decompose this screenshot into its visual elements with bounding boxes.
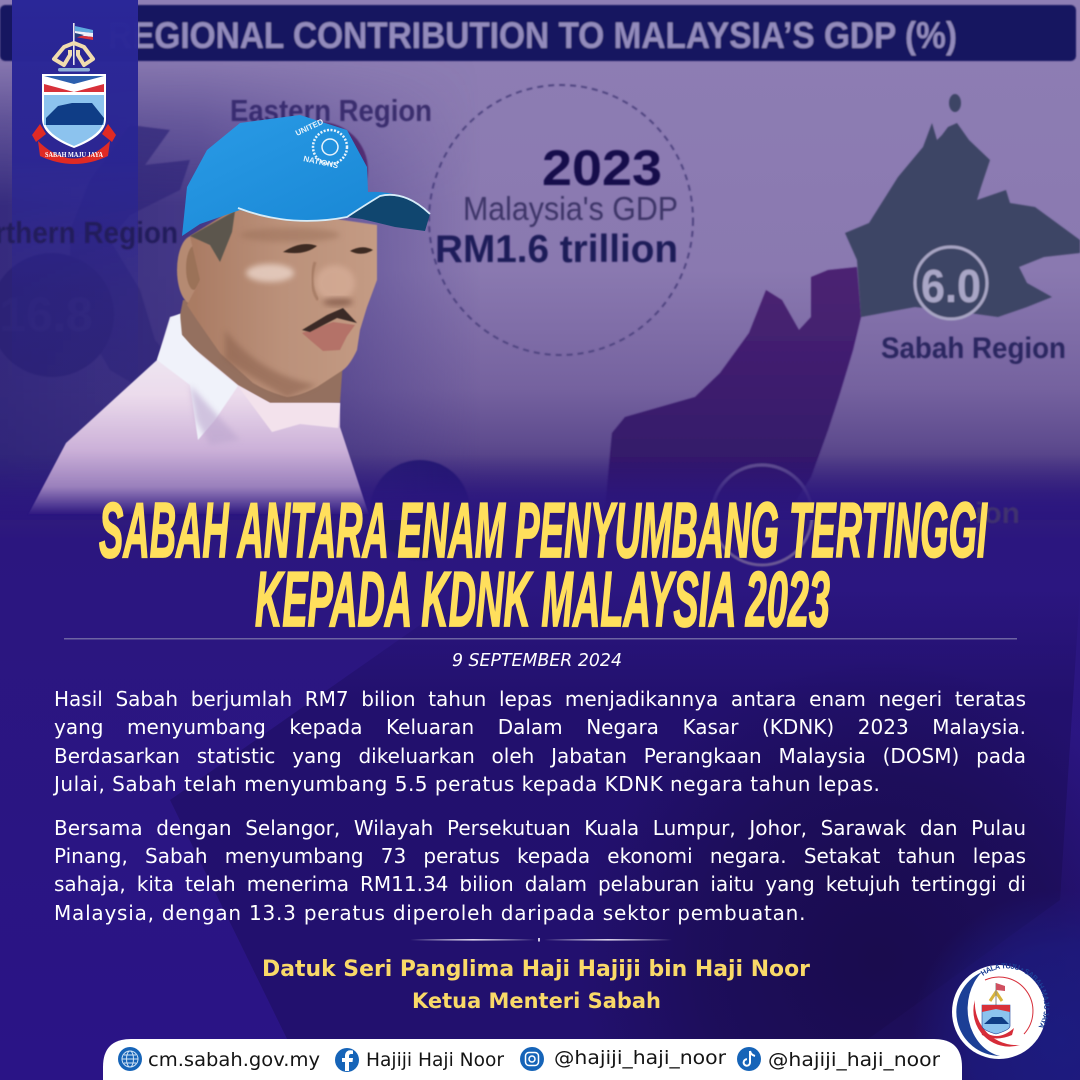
GDP text: 2023	[542, 140, 662, 196]
blue logo column	[12, 0, 138, 400]
Sabah 6.0 badge: 6.0	[921, 260, 981, 312]
motto ribbon	[32, 124, 116, 164]
lower region badge	[712, 465, 812, 565]
arms crest	[54, 43, 93, 65]
GDP text: RM1.6 trillion	[435, 228, 678, 271]
dark lower-left badge	[370, 460, 470, 560]
instagram: @hajiji_haji_noor	[554, 1047, 726, 1069]
UN cap emblem	[294, 117, 347, 170]
map: Sabah	[845, 94, 1080, 317]
body text: Hasil Sabah berjumlah RM7 bilion tahun lepas menjadikannya antara enam negeri teratas	[54, 687, 1026, 711]
Sabah coat of arms	[32, 23, 116, 164]
hair	[190, 211, 235, 262]
Eastern badge behind cap	[272, 122, 368, 218]
body text: Berdasarkan statistic yang dikeluarkan oleh Jabatan Perangkaan Malaysia (DOSM) pada	[54, 744, 1026, 768]
lower region label: ion	[975, 497, 1020, 530]
footer bar	[103, 1039, 962, 1080]
Sabah Region label: Sabah Region	[881, 332, 1066, 365]
Sabah 6.0 badge	[915, 247, 987, 319]
cap	[182, 115, 430, 236]
signature name: Datuk Seri Panglima Haji Hajiji bin Haji Noor	[262, 957, 810, 982]
shirt	[28, 313, 369, 515]
motto ribbon: SABAH MAJU JAYA	[45, 150, 103, 159]
slide heading band: REGIONAL CONTRIBUTION TO MALAYSIA’S GDP (%)	[108, 15, 957, 56]
round emblem	[952, 963, 1050, 1059]
map: peninsular region	[70, 125, 190, 400]
body text: yang menyumbang kepada Keluaran Dalam Negara Kasar (KDNK) 2023 Malaysia.	[54, 715, 1026, 739]
tiktok: @hajiji_haji_noor	[768, 1049, 940, 1071]
map: Sarawak	[604, 267, 861, 520]
moustache	[302, 308, 357, 332]
divider	[64, 638, 1017, 640]
signature divider	[410, 938, 672, 942]
body text	[52, 687, 1026, 925]
shirt collar	[157, 314, 238, 440]
crest wreath	[58, 68, 90, 72]
face shading	[225, 228, 355, 398]
left dark veil	[0, 60, 448, 488]
GDP text: Malaysia's GDP	[463, 190, 678, 227]
facebook: Hajiji Haji Noor	[366, 1049, 504, 1071]
shirt shadow	[190, 385, 240, 445]
body text: sahaja, kita telah menerima RM11.34 bilion dalam pelaburan iaitu yang ketujuh tertinggi di	[54, 872, 1026, 896]
16.8 badge	[0, 253, 114, 377]
lower background facets	[170, 590, 1080, 1080]
slide heading band	[0, 5, 1076, 61]
eyes	[283, 244, 317, 253]
UN cap emblem: NATIONS	[303, 154, 340, 170]
GDP text	[435, 140, 678, 271]
body text: Julai, Sabah telah menyumbang 5.5 peratus kepada KDNK negara tahun lepas.	[54, 772, 880, 796]
background photo: GDP slide	[0, 5, 1080, 565]
Northern Region label: rthern Region	[0, 215, 178, 250]
Eastern Region label: Eastern Region	[230, 93, 432, 128]
lower fade over photo	[0, 455, 1080, 520]
emblem ring text: HALA TUJU • SABAH MAJU JAYA	[980, 963, 1050, 1028]
16.8 badge: 16.8	[0, 289, 93, 342]
neck	[177, 300, 343, 403]
lips	[302, 322, 355, 351]
date: 9 SEPTEMBER 2024	[452, 651, 622, 671]
signature role: Ketua Menteri Sabah	[412, 989, 661, 1013]
flag	[73, 23, 93, 65]
shield	[42, 74, 106, 148]
body text: Malaysia, dengan 13.3 peratus diperoleh daripada sektor pembuatan.	[54, 901, 806, 925]
UN cap emblem: UNITED	[294, 117, 325, 138]
ear	[177, 236, 207, 304]
shirt right collar	[238, 386, 340, 432]
cap brim underside	[347, 195, 430, 231]
headline	[99, 486, 988, 643]
website: cm.sabah.gov.my	[148, 1049, 320, 1071]
portrait	[28, 115, 430, 515]
dashed GDP circle	[429, 85, 693, 355]
body text: Bersama dengan Selangor, Wilayah Persekutuan Kuala Lumpur, Johor, Sarawak dan Pulau	[54, 816, 1026, 840]
cap brim edge	[238, 195, 430, 221]
head	[187, 205, 377, 397]
body text: Pinang, Sabah menyumbang 73 peratus kepada ekonomi negara. Setakat tahun lepas	[54, 844, 1026, 868]
